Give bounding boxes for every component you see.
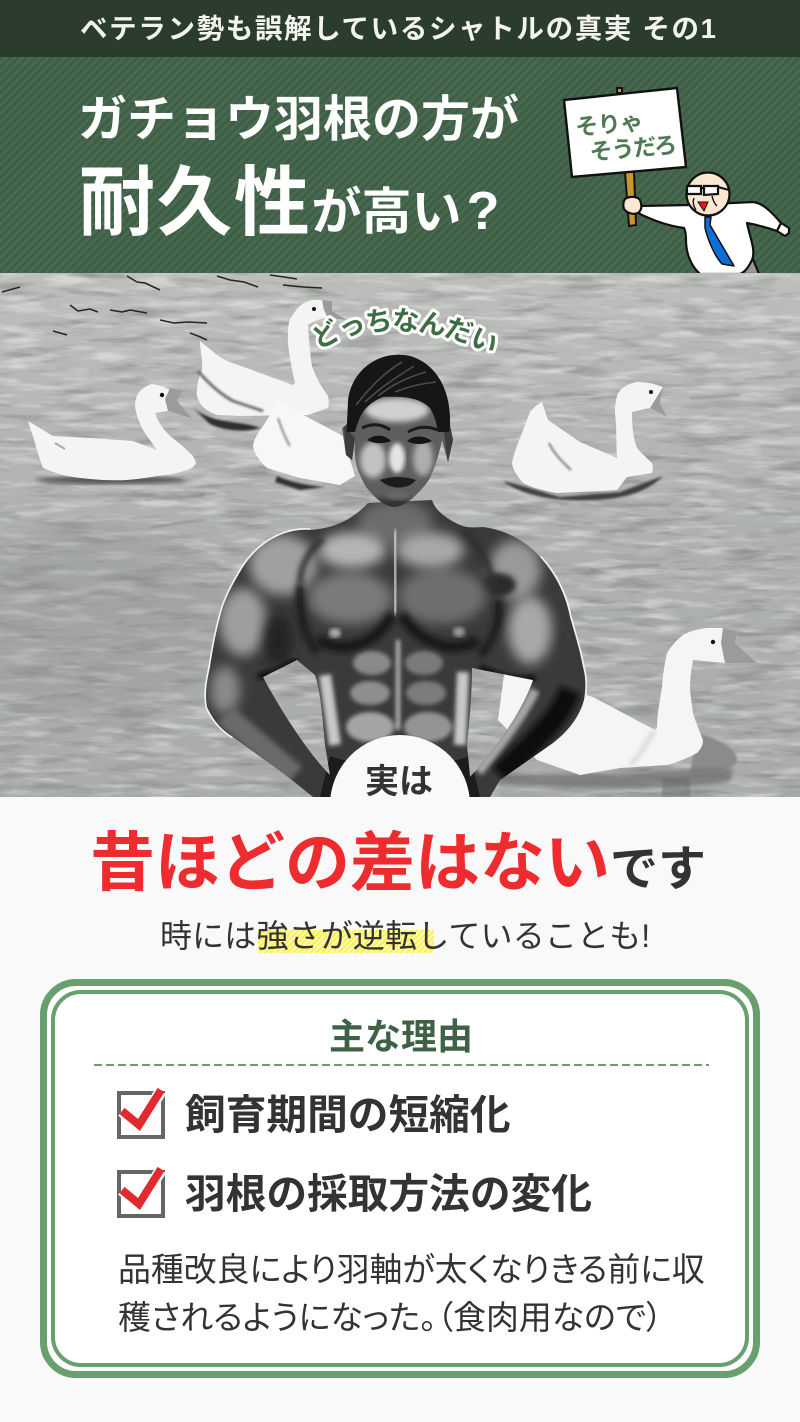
goose: middle front — [253, 401, 355, 490]
head — [342, 354, 453, 507]
speech text: dochi nandai: どっちなんだい — [310, 304, 498, 354]
reason 2: 羽根の採取方法の変化 — [185, 1171, 592, 1217]
photo: man and geese on water — [0, 273, 800, 797]
goose: bottom right — [497, 628, 757, 797]
illustration: man with sign — [562, 86, 790, 273]
sign text — [574, 100, 677, 168]
top bar title: ベテラン勢も誤解しているシャトルの真実 その1 — [80, 13, 718, 44]
water background — [0, 273, 800, 797]
sign text: そうだろ — [588, 126, 677, 167]
header panel — [0, 57, 800, 273]
goose: right — [503, 382, 667, 500]
inner frame — [51, 990, 749, 1367]
man body — [623, 172, 789, 274]
circle tab text: 実は — [365, 763, 433, 801]
headline line 2: 耐久性が高い? — [79, 161, 500, 246]
goose: top middle — [193, 300, 347, 431]
dashed divider — [94, 1064, 709, 1066]
sign post — [617, 88, 636, 226]
icon: checkbox 1 — [117, 1088, 165, 1139]
icon: checkbox 2 — [117, 1166, 165, 1218]
main conclusion: 昔ほどの差はないです — [90, 826, 706, 899]
sub text: 時には強さが逆転していることも! — [160, 918, 650, 954]
goose: left — [28, 384, 196, 484]
man — [200, 350, 600, 800]
top bar — [0, 0, 800, 57]
muscular torso and arms — [200, 490, 600, 800]
explanation: 穫されるようになった。（食肉用なので） — [118, 1299, 663, 1336]
sign text: そりゃ — [574, 102, 644, 142]
reason 1: 飼育期間の短縮化 — [185, 1092, 511, 1138]
headline line 1: ガチョウ羽根の方が — [78, 93, 519, 147]
reasons heading: 主な理由 — [329, 1016, 473, 1057]
explanation — [118, 1251, 705, 1336]
circle tab — [330, 735, 470, 875]
explanation: 品種改良により羽軸が太くなりきる前に収 — [118, 1251, 705, 1288]
highlight marker — [258, 930, 434, 953]
man face — [687, 186, 729, 211]
sign board — [564, 88, 686, 177]
reasons panel — [40, 979, 760, 1378]
